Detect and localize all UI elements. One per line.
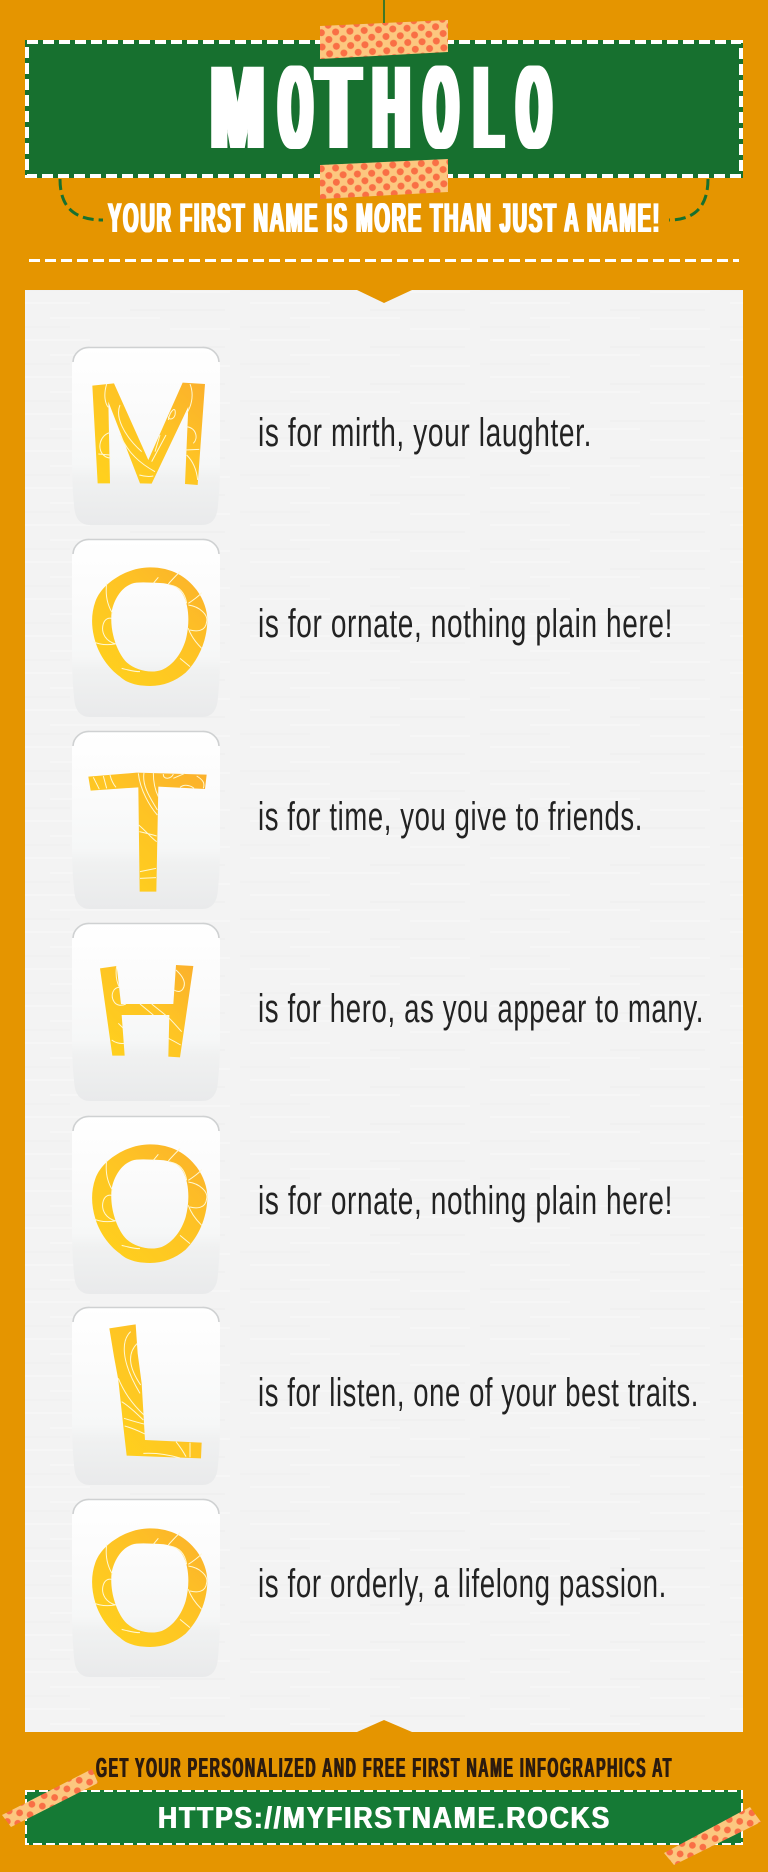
connector: left curve	[60, 179, 103, 220]
tape: footer right	[664, 1807, 761, 1865]
footer banner	[25, 1790, 743, 1845]
letter card: O	[72, 1116, 220, 1294]
title: M	[211, 42, 264, 174]
letter card: H	[72, 923, 220, 1101]
letter card: L	[72, 1307, 220, 1485]
title: T	[317, 42, 360, 174]
letter card: O	[72, 1499, 220, 1677]
panel: letters	[25, 290, 743, 1732]
tape: top	[320, 20, 448, 59]
title: O	[424, 42, 458, 174]
title banner	[25, 40, 743, 178]
hanging line	[383, 0, 385, 24]
letter card: T	[72, 731, 220, 909]
text: M: is for mirth, your laughter.	[258, 411, 592, 455]
connector: right curve	[669, 179, 708, 220]
footer url: HTTPS://MYFIRSTNAME.ROCKS	[158, 1801, 611, 1835]
text: O	[518, 42, 550, 174]
title: O	[280, 42, 312, 174]
title: L	[474, 42, 502, 174]
letter card: O	[72, 539, 220, 717]
title: H	[373, 42, 410, 174]
dashed divider	[29, 259, 739, 262]
tape: bottom	[320, 159, 448, 199]
tape: footer left	[2, 1769, 98, 1827]
letter card: M	[72, 347, 220, 525]
